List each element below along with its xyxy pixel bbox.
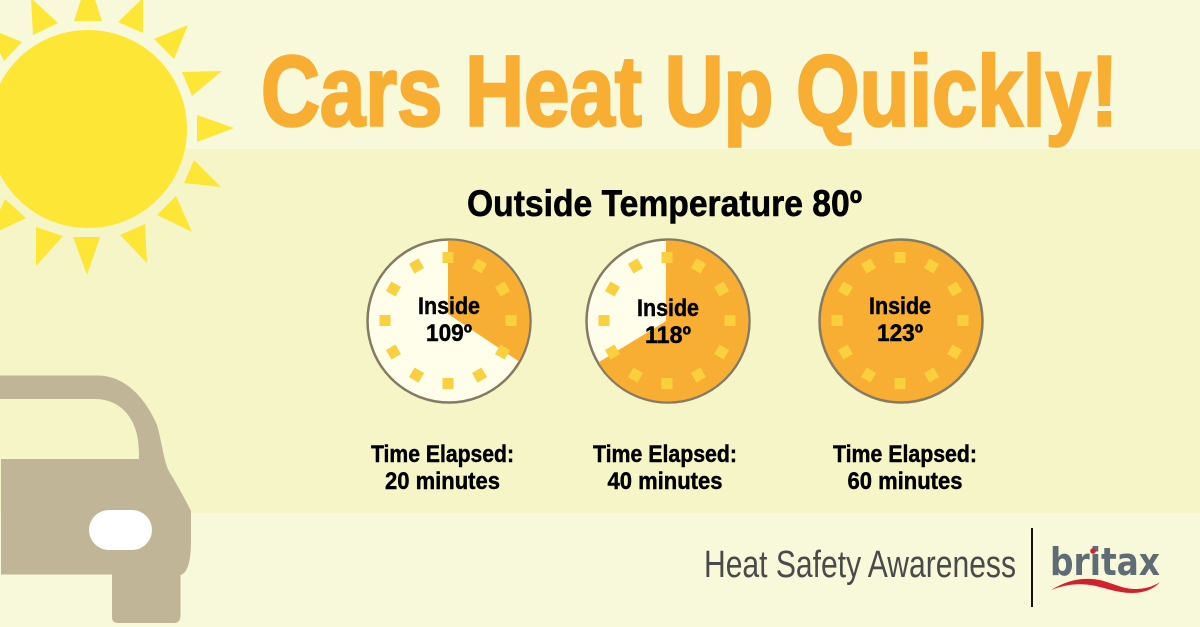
- label: 20 minutes elapsed: [371, 441, 514, 495]
- dial: 40 minutes: [586, 240, 750, 402]
- label: 60 minutes elapsed: [833, 441, 977, 495]
- dial: 20 minutes: Inside: [418, 293, 480, 320]
- heading: outside temperature: Outside Temperature 80º: [467, 183, 862, 224]
- label: 60 minutes elapsed: Time Elapsed:: [833, 441, 977, 468]
- label: 40 minutes elapsed: [593, 441, 737, 495]
- icon: sun: [0, 0, 234, 275]
- dial: 20 minutes: [368, 240, 530, 402]
- label: 20 minutes elapsed: 20 minutes: [385, 468, 500, 495]
- label: 40 minutes elapsed: 40 minutes: [608, 468, 722, 495]
- dial: 40 minutes: Inside: [637, 295, 699, 322]
- dial: 40 minutes: 118º: [645, 322, 691, 349]
- label: 40 minutes elapsed: Time Elapsed:: [593, 441, 737, 468]
- dial: 60 minutes: Inside: [869, 293, 931, 320]
- divider: [1031, 528, 1033, 607]
- label: 20 minutes elapsed: Time Elapsed:: [371, 441, 514, 468]
- label: 60 minutes elapsed: 60 minutes: [848, 468, 962, 495]
- footer text: Heat Safety Awareness: [704, 544, 1016, 586]
- dial: 20 minutes: 109º: [426, 320, 472, 347]
- logo: britax: britax: [1050, 540, 1160, 584]
- dial: 60 minutes: [820, 240, 982, 402]
- dial: 60 minutes: 123º: [877, 320, 923, 347]
- icon: car: [0, 376, 191, 623]
